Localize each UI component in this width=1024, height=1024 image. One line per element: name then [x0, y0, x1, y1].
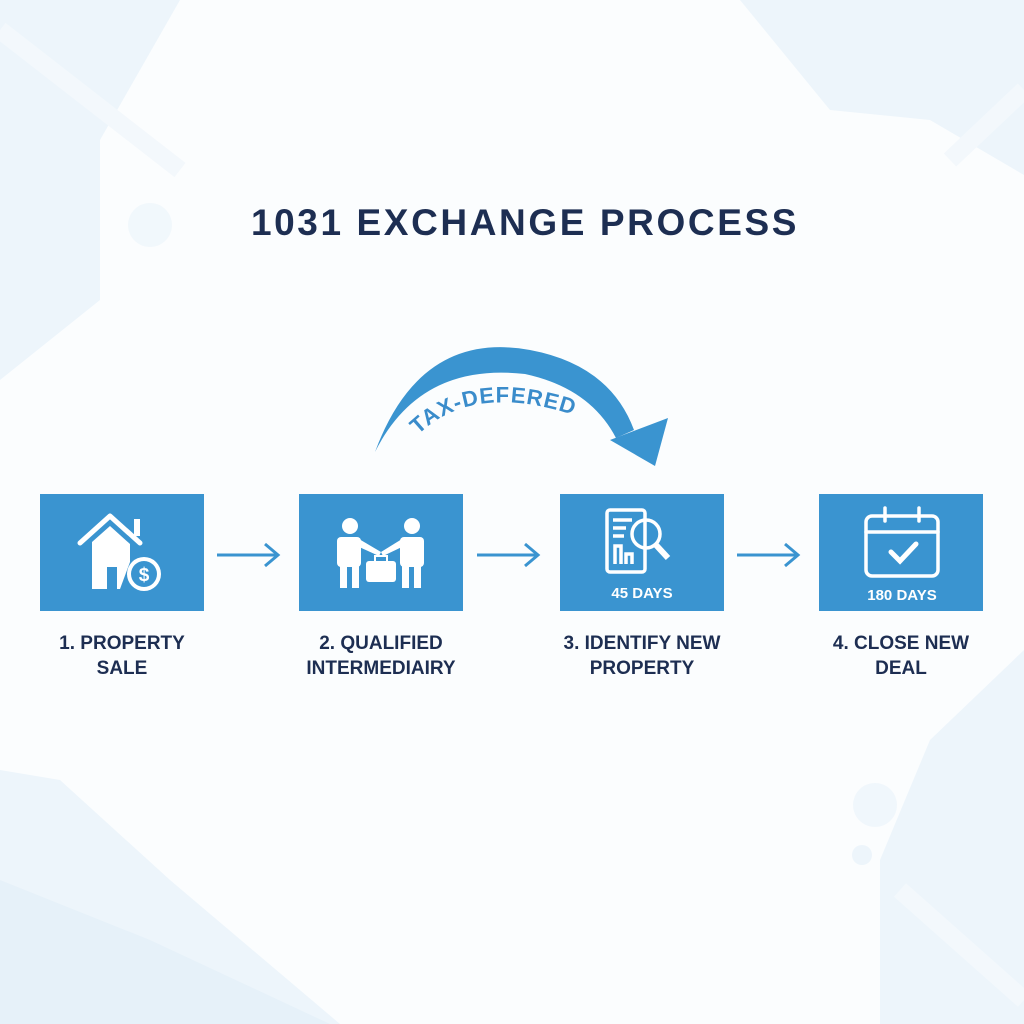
- icon: house with dollar: $: [139, 565, 150, 586]
- arc arrow: tax-deferred: [375, 347, 668, 466]
- arrow 3: [737, 542, 800, 568]
- step 2 box: [299, 494, 463, 611]
- arrow 1: [217, 542, 280, 568]
- label 3: 3. IDENTIFY NEW: [564, 633, 720, 654]
- icon: document magnifier: [605, 508, 673, 602]
- step 1 box: [40, 494, 204, 611]
- icon: two people handshake briefcase: [337, 518, 424, 588]
- title: 1031 EXCHANGE PROCESS: [251, 202, 799, 243]
- label 3: PROPERTY: [590, 658, 694, 679]
- arrow 2: [477, 542, 540, 568]
- label 2: INTERMEDIAIRY: [306, 658, 456, 679]
- label 4: 4. CLOSE NEW: [833, 633, 969, 654]
- label 1: [59, 633, 185, 679]
- label 2: 2. QUALIFIED: [319, 633, 443, 654]
- label 1: SALE: [97, 658, 147, 679]
- label 1: 1. PROPERTY: [59, 633, 185, 654]
- icon: calendar check: 180 DAYS: [867, 587, 937, 604]
- label 4: [833, 633, 969, 679]
- icon: document magnifier: 45 DAYS: [611, 585, 673, 602]
- step 4 box: [819, 494, 983, 611]
- arc arrow: tax-deferred: TAX-DEFERED: [408, 387, 575, 432]
- label 3: [564, 633, 720, 679]
- icon: calendar check: [864, 506, 940, 604]
- icon: house with dollar: [78, 513, 161, 591]
- label 2: [306, 633, 456, 679]
- step 3 box: [560, 494, 724, 611]
- label 4: DEAL: [875, 658, 927, 679]
